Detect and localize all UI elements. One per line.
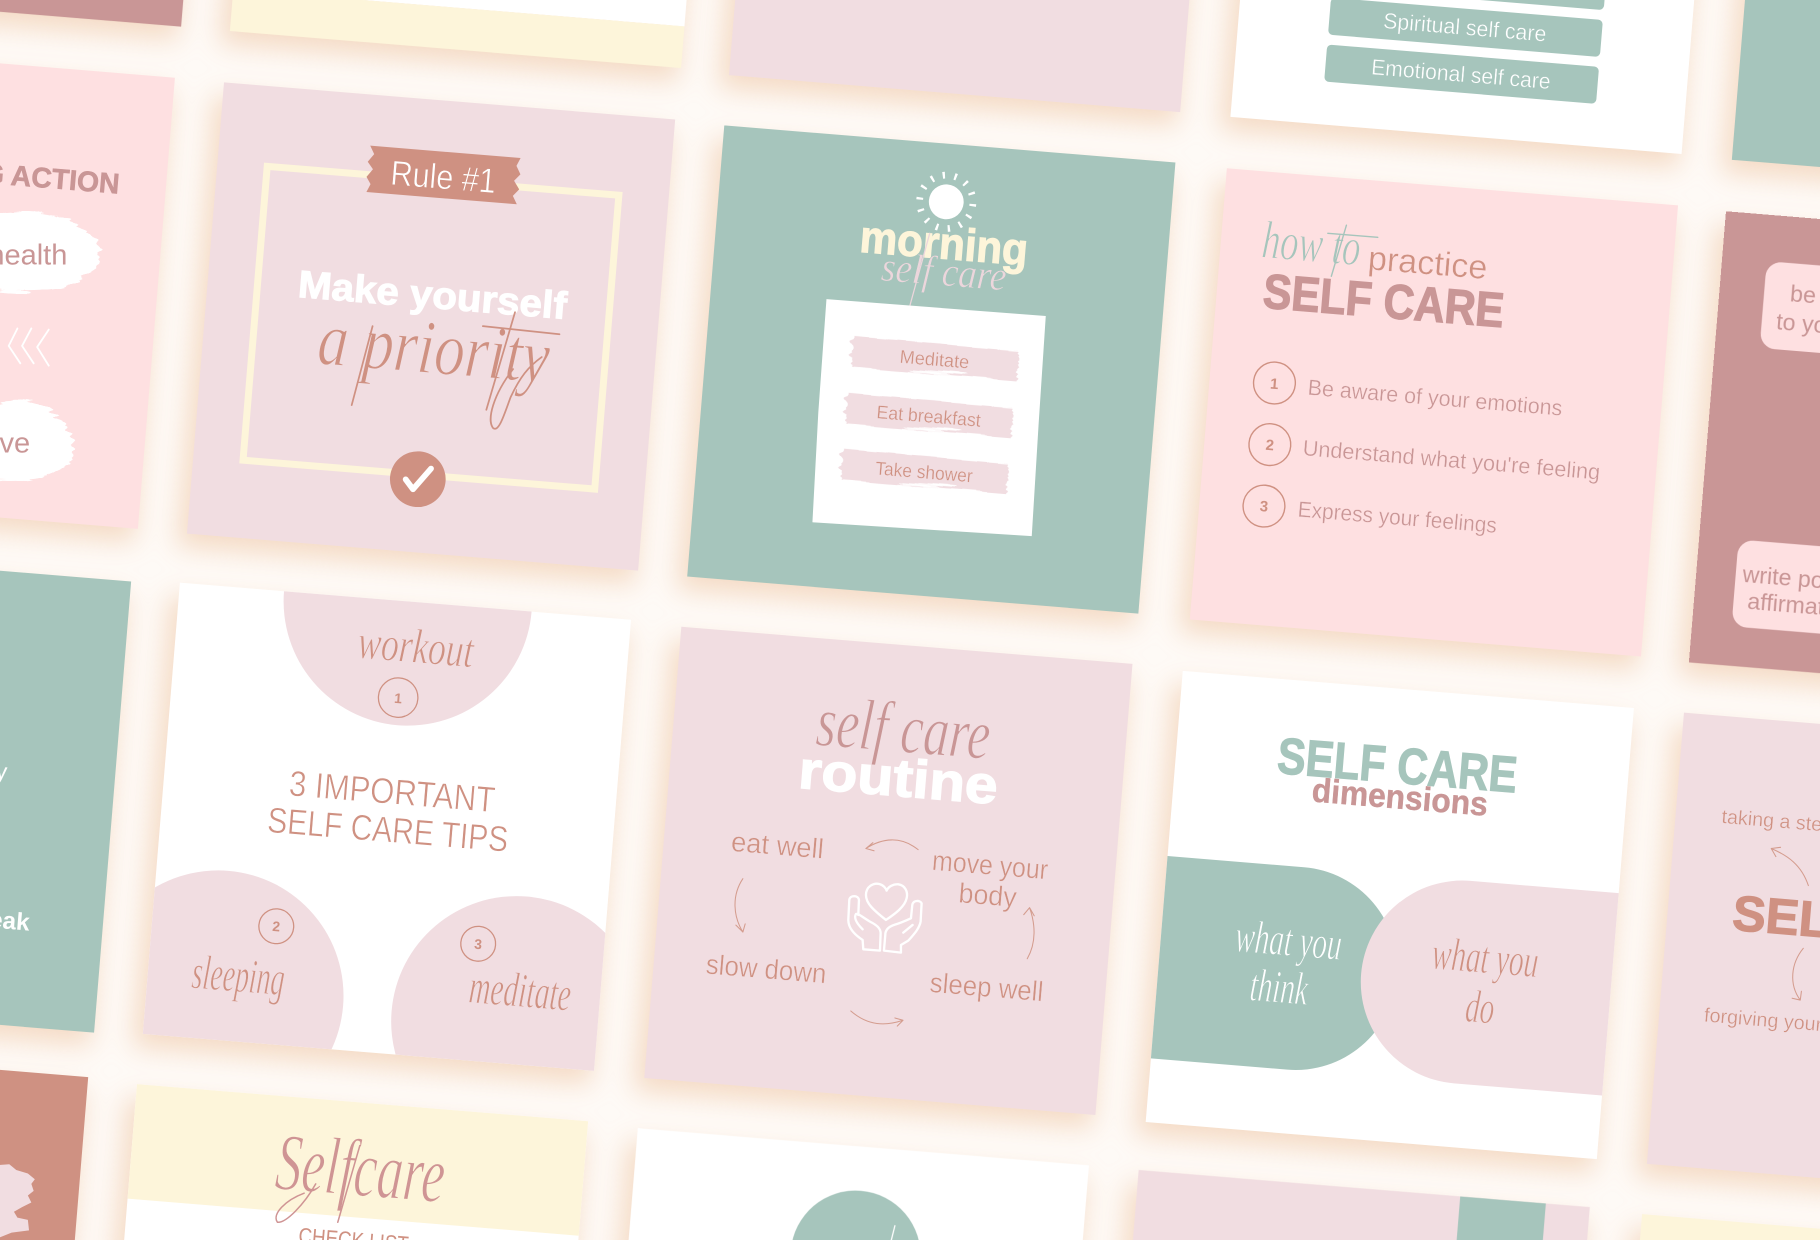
ribbon: rule #1 xyxy=(365,146,522,204)
frame xyxy=(243,166,619,489)
script: what you do: what you xyxy=(1430,929,1541,988)
label: move your body: body xyxy=(958,877,1018,913)
step 3 xyxy=(1241,484,1499,546)
ribbon: rule #1: Rule #1 xyxy=(389,154,498,201)
script: a priority: a priority xyxy=(315,296,554,400)
script: workout: workout xyxy=(356,615,477,678)
item: eat breakfast xyxy=(844,394,1013,437)
step 3: 3 xyxy=(1259,498,1269,516)
script: sleeping: sleeping xyxy=(190,945,287,1006)
script: how to: how to xyxy=(1260,209,1363,277)
script: selfcare: Selfcare xyxy=(272,1117,449,1220)
button: spiritual self care: Spiritual self care xyxy=(1382,8,1547,46)
panel: blush card with green stripe xyxy=(1102,1170,1590,1240)
badge 3 xyxy=(459,925,497,963)
script: what you do: do xyxy=(1463,981,1497,1035)
tip box: affirmations xyxy=(1731,540,1820,657)
heading: morning: morning xyxy=(858,211,1030,275)
heading: self care: SELF CARE xyxy=(1275,727,1520,804)
script stroke in circle xyxy=(890,1226,895,1240)
heading: routine: routine xyxy=(796,741,1000,816)
script: self care: self care xyxy=(880,244,1008,301)
script: self care xyxy=(879,230,1010,313)
panel: three important tips card xyxy=(83,455,685,1157)
heading: self care: SELF CARE xyxy=(1261,265,1506,338)
badge 2: 2 xyxy=(272,918,281,935)
panel: green card top right xyxy=(1732,0,1820,197)
panel: mauve tips card right xyxy=(1689,211,1820,699)
step 3: Express your feelings xyxy=(1297,497,1498,538)
item: take shower xyxy=(840,449,1009,493)
script: what you think xyxy=(1229,911,1344,1018)
heading: dimensions: dimensions xyxy=(1310,772,1489,824)
script: what you think: think xyxy=(1248,960,1311,1016)
label: slow down: slow down xyxy=(705,949,828,989)
label: move your body: move your xyxy=(931,845,1049,885)
arrows: cycle xyxy=(735,840,1034,1026)
panel: self care routine card xyxy=(644,627,1132,1115)
panel: terracotta card bottom left xyxy=(0,1040,88,1240)
panel: yellow card bottom right xyxy=(1605,1214,1820,1240)
step 1 xyxy=(1252,360,1564,428)
script: selfcare xyxy=(270,1117,449,1236)
badge 2 xyxy=(258,907,295,945)
badge 1: 1 xyxy=(394,690,403,706)
icon: hands holding heart xyxy=(848,884,922,953)
item: meditate: Meditate xyxy=(899,346,970,372)
panel: selfcare checklist card xyxy=(100,1084,588,1240)
icon: chevrons xyxy=(9,328,49,366)
shape: green circle xyxy=(786,1185,926,1240)
panel: blush card top middle xyxy=(729,0,1217,112)
heading: 3 important self care tips: SELF CARE TIPS xyxy=(266,799,510,860)
heading: 3 important self care tips: 3 IMPORTANT xyxy=(288,763,497,820)
panel: self care dimensions card xyxy=(1146,671,1634,1159)
panel: forgiving yourself card right xyxy=(1647,713,1820,1201)
label: move your body xyxy=(929,845,1049,915)
item: eat breakfast: Eat breakfast xyxy=(876,401,982,431)
brush: health xyxy=(0,212,99,291)
shape: green rounded block xyxy=(1151,856,1405,1078)
button: emotional self care xyxy=(1324,44,1599,104)
script: self care: self care xyxy=(814,681,994,775)
shape: blush rounded block xyxy=(1353,873,1619,1096)
item: meditate xyxy=(850,337,1019,381)
panel: taking action card xyxy=(0,41,175,529)
tip box: be kind xyxy=(1760,261,1820,378)
step 2 xyxy=(1247,422,1602,493)
panel: yellow and white card top xyxy=(230,0,718,68)
icon: check badge xyxy=(388,449,448,509)
arrows xyxy=(1771,847,1808,1000)
script: what you think: what you xyxy=(1233,911,1344,971)
step 2: 2 xyxy=(1265,437,1275,454)
panel: self care types list xyxy=(1230,0,1719,154)
panel: white card bottom with green circle xyxy=(601,1128,1089,1240)
panel: mauve card top left xyxy=(0,0,218,27)
button: emotional self care: Emotional self care xyxy=(1370,54,1552,94)
heading: 3 important self care tips xyxy=(266,761,513,860)
panel: green card left xyxy=(0,544,131,1033)
badge 1 xyxy=(377,676,419,719)
step 1: 1 xyxy=(1269,375,1279,393)
heading: practice: practice xyxy=(1367,240,1489,287)
icon: sun xyxy=(917,173,975,231)
script: a priority xyxy=(311,293,569,446)
step 1: Be aware of your emotions xyxy=(1307,375,1563,421)
brush: love xyxy=(0,401,74,480)
stripe xyxy=(1423,1196,1546,1240)
script: what you do xyxy=(1426,929,1541,1038)
label: eat well: eat well xyxy=(730,826,825,865)
panel: rule number one card xyxy=(187,82,675,571)
badge 3: 3 xyxy=(474,936,483,952)
script: meditate: meditate xyxy=(467,959,573,1022)
brush: blush mark xyxy=(0,1164,35,1240)
step 2: Understand what you're feeling xyxy=(1302,435,1601,485)
panel: how to practice self care card xyxy=(1190,168,1678,657)
label: sleep well: sleep well xyxy=(929,967,1045,1007)
panel: morning self care card xyxy=(687,125,1175,614)
button: spiritual self care xyxy=(1328,0,1603,57)
shapes: circles xyxy=(143,591,606,1071)
paper checklist xyxy=(808,298,1050,540)
item: take shower: Take shower xyxy=(875,457,974,486)
heading: make yourself: Make yourself xyxy=(296,263,569,328)
